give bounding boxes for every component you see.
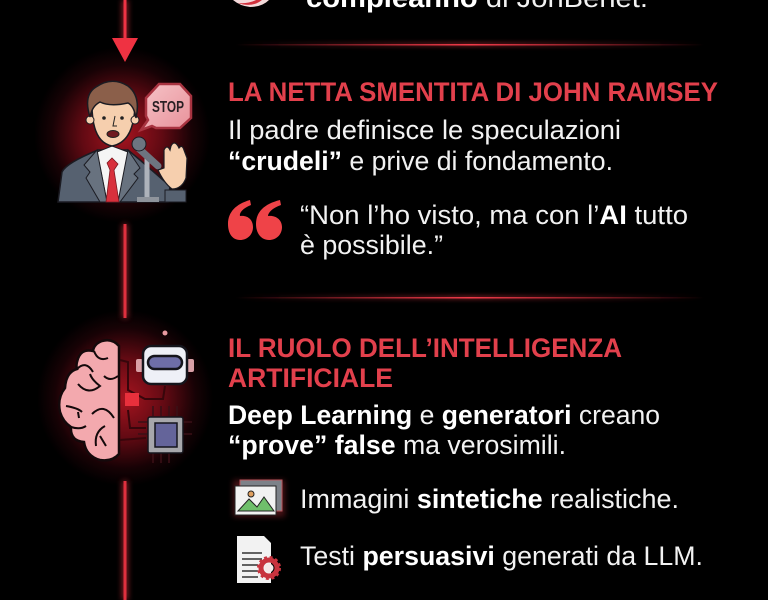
circuit node (125, 393, 139, 406)
shirt (97, 146, 128, 202)
eyes and mouth (102, 116, 106, 120)
timeline segment bottom (122, 481, 128, 600)
tie (106, 158, 119, 202)
icon fragment: previous section (233, 0, 269, 7)
brain (59, 340, 119, 460)
heading: il ruolo dell'intelligenza artificiale: IL RUOLO DELL’INTELLIGENZA (228, 333, 622, 363)
quote text: “Non l’ho visto, ma con l’AI tutto (300, 200, 688, 230)
timeline segment middle (122, 224, 128, 318)
stop sign: STOP (152, 99, 184, 116)
glow behind man icon (34, 47, 210, 223)
chip (138, 406, 192, 463)
robot (136, 330, 194, 384)
body text: padre: “crudeli” e prive di fondamento. (228, 146, 613, 176)
lapels (84, 150, 140, 202)
glow behind brain icon (37, 310, 213, 486)
body text: padre (228, 115, 621, 176)
quote text (300, 200, 688, 260)
divider middle (235, 296, 705, 299)
quote text: è possibile.” (300, 230, 443, 260)
icon: quotation mark (228, 200, 282, 240)
raised hand (158, 143, 187, 189)
timeline segment with arrow (112, 0, 138, 62)
jacket (58, 150, 170, 202)
icon: document with gear (237, 536, 280, 583)
face (92, 90, 135, 146)
body text: deep learning: “prove” false ma verosimili. (228, 430, 566, 460)
text: testi persuasivi: Testi persuasivi generati da LLM. (300, 541, 703, 571)
icon: man speaking at microphone with stop sign (58, 81, 191, 202)
sleeve (165, 190, 186, 202)
text: immagini sintetiche: Immagini sintetiche realistiche. (300, 484, 679, 514)
body text: deep learning (228, 400, 660, 460)
divider top (235, 43, 705, 46)
body text: padre: Il padre definisce le speculazioni (228, 115, 621, 145)
heading: il ruolo dell'intelligenza artificiale: ARTIFICIALE (228, 363, 393, 393)
icon: synthetic images (233, 480, 285, 517)
heading: la netta smentita: LA NETTA SMENTITA DI JOHN RAMSEY (228, 77, 718, 107)
microphone (132, 137, 159, 202)
body text: deep learning: Deep Learning e generatori creano (228, 400, 660, 430)
heading: il ruolo dell'intelligenza artificiale (228, 333, 622, 393)
circuit traces (120, 360, 165, 440)
icon: brain connected to robot and chip (59, 330, 194, 463)
hair (88, 81, 137, 118)
